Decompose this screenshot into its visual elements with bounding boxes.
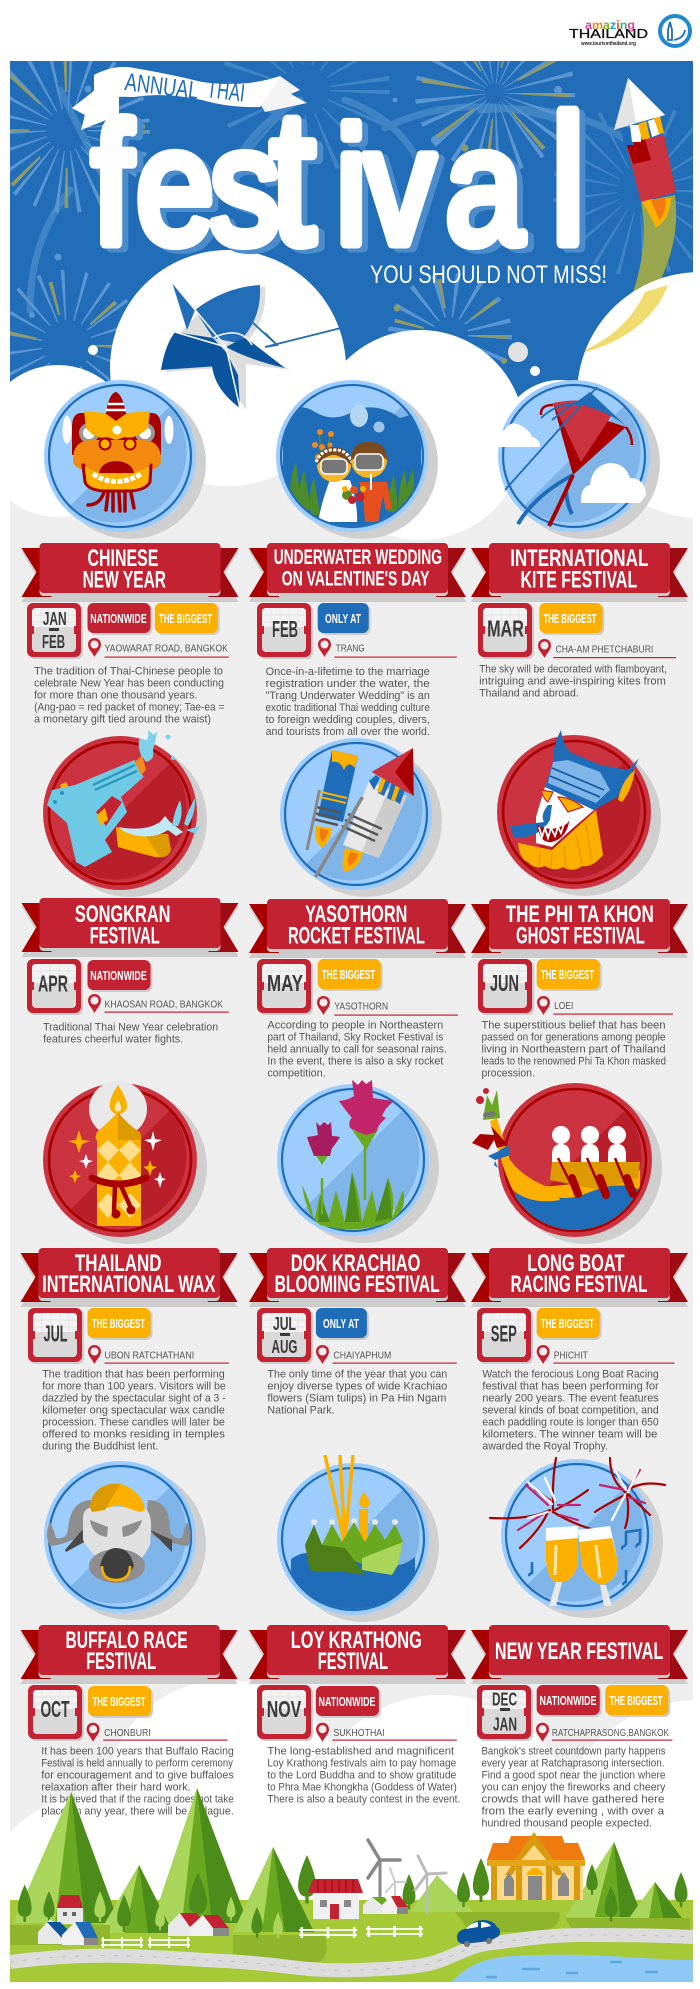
badge: nationwide	[537, 1685, 602, 1717]
logo: blue seal	[660, 16, 690, 46]
description: you can enjoy the fireworks and cheery	[482, 1782, 666, 1794]
location: SUKHOTHAI	[333, 1727, 385, 1739]
subtitle: YOU SHOULD NOT MISS!	[370, 261, 607, 289]
description: (Ang-pao = red packet of money; Tae-ea =	[34, 702, 224, 714]
description: procession.	[482, 1068, 535, 1080]
location	[536, 1723, 672, 1742]
logo: amazing thailand	[569, 18, 648, 47]
ribbon heading: SONGKRAN	[75, 901, 170, 928]
clouds bottom	[10, 1680, 693, 1900]
icon: buffalo	[44, 1461, 206, 1620]
description: In the event, there is also a sky rocket	[267, 1056, 443, 1068]
description: during the Buddhist lent.	[42, 1441, 158, 1453]
location: LOEI	[554, 1000, 573, 1012]
rocket trail behind clouds	[633, 195, 676, 292]
icon: red kite	[497, 380, 660, 539]
description: It has been 100 years that Buffalo Racing	[41, 1746, 234, 1758]
description	[482, 1746, 666, 1830]
location: YAOWARAT ROAD, BANGKOK	[104, 643, 228, 655]
description: for more than 100 years. Visitors will be	[42, 1381, 226, 1393]
temple	[487, 1832, 585, 1900]
icon: underwater couple	[276, 380, 438, 539]
location: PHICHIT	[554, 1350, 588, 1362]
location: UBON RATCHATHANI	[104, 1350, 194, 1362]
description: leads to the renowned Phi Ta Khon masked	[482, 1056, 666, 1068]
ribbon heading: LONG BOAT	[527, 1250, 625, 1277]
description: celebrate New Year has been conducting	[34, 677, 224, 689]
badge: the biggest	[88, 1686, 153, 1718]
description	[267, 1369, 447, 1417]
ribbon heading	[249, 543, 466, 602]
badge: nationwide	[88, 603, 152, 635]
description: held annually to call for seasonal rains.	[267, 1044, 447, 1056]
card: dok krachiao	[249, 1080, 466, 1417]
badge: only at: ONLY AT	[323, 1316, 359, 1331]
badge: the biggest	[88, 1308, 152, 1340]
landscape	[10, 1788, 693, 1982]
description: enjoy diverse types of wide Krachiao	[267, 1381, 447, 1393]
description: several kinds of boat competition, and	[482, 1405, 659, 1417]
trees	[18, 1855, 687, 1938]
description: relaxation after their hard work.	[41, 1782, 191, 1794]
description: The superstitious belief that has been	[482, 1020, 666, 1032]
location: KHAOSAN ROAD, BANGKOK	[104, 999, 223, 1011]
ribbon heading	[249, 1248, 466, 1307]
location: RATCHAPRASONG,BANGKOK	[552, 1727, 669, 1739]
title: festival: a	[445, 94, 524, 279]
description: crowds that will have gathered here	[482, 1794, 664, 1806]
rocket illustration	[614, 78, 676, 228]
location	[87, 1723, 227, 1742]
card: long boat	[471, 1083, 688, 1453]
description	[34, 665, 224, 726]
title: festival	[92, 72, 591, 288]
title: festival: e	[136, 94, 214, 279]
location	[316, 1723, 457, 1742]
title: festival: l	[551, 78, 585, 282]
ribbon heading: FESTIVAL	[318, 1648, 388, 1675]
description	[479, 664, 667, 700]
icon: champagne and fireworks	[490, 1458, 665, 1618]
badge: the biggest	[539, 603, 604, 635]
banner: annual thai: ANNUAL	[123, 68, 200, 105]
location	[318, 638, 457, 658]
location: TRANG	[336, 643, 365, 655]
badge: the biggest	[318, 959, 383, 991]
description: and tourists from all over the world.	[266, 726, 430, 738]
card: yasothorn rocket	[249, 738, 466, 1080]
description: National Park.	[267, 1405, 335, 1417]
description	[41, 1746, 234, 1818]
calendar: jul: JUL	[44, 1321, 68, 1347]
description: According to people in Northeastern	[267, 1020, 443, 1032]
location	[88, 994, 229, 1013]
description: There is also a beauty contest in the event.	[267, 1794, 460, 1806]
ribbon heading	[249, 1625, 466, 1684]
ribbon heading: NEW YEAR	[83, 566, 166, 593]
title: festival: l	[557, 82, 591, 286]
ribbon heading: INTERNATIONAL WAX	[42, 1271, 215, 1298]
description: competition.	[267, 1068, 326, 1080]
description: for more than one thousand years.	[34, 689, 197, 701]
ribbon heading: DOK KRACHIAO	[291, 1250, 420, 1277]
fireworks background	[10, 61, 693, 381]
title: festival: f	[92, 88, 133, 280]
card: loy krathong	[249, 1455, 466, 1806]
calendar: apr	[27, 959, 83, 1015]
badge: the biggest: THE BIGGEST	[92, 1694, 146, 1709]
description: The tradition of Thai-Chinese people to	[34, 665, 223, 677]
badge: nationwide: NATIONWIDE	[318, 1694, 376, 1709]
badge: the biggest: THE BIGGEST	[541, 967, 594, 982]
location	[537, 1345, 674, 1364]
description: Traditional Thai New Year celebration	[43, 1021, 218, 1033]
badge: nationwide: NATIONWIDE	[540, 1693, 597, 1708]
ribbon heading: ROCKET FESTIVAL	[288, 922, 425, 949]
road	[10, 1935, 693, 1970]
title: festival: t	[276, 76, 321, 288]
badge: the biggest: THE BIGGEST	[541, 1316, 594, 1331]
description: Thailand and abroad.	[479, 688, 579, 700]
description: dazzled by the spectacular sight of a 3 -	[42, 1393, 226, 1405]
ribbon heading	[471, 1248, 688, 1307]
description: awarded the Royal Trophy.	[482, 1441, 608, 1453]
ribbon heading: INTERNATIONAL	[510, 545, 648, 572]
description: Find a good spot near the junction where	[482, 1770, 666, 1782]
calendar: feb	[257, 603, 313, 659]
ribbon heading: FESTIVAL	[90, 922, 160, 949]
description: festival that has been performing for	[482, 1381, 659, 1393]
calendar: jul aug: AUG	[272, 1337, 298, 1357]
fences	[101, 1926, 423, 1948]
description: nearly 200 years. The event features	[482, 1393, 659, 1405]
description	[267, 1746, 460, 1806]
description	[266, 666, 430, 738]
calendar: jul aug	[257, 1308, 313, 1364]
description: procession. These candles will later be	[42, 1417, 225, 1429]
calendar: jan feb	[27, 603, 83, 659]
badge: the biggest	[155, 603, 220, 635]
title: festival: i	[336, 94, 367, 279]
ground	[10, 1900, 693, 1982]
card: buffalo race	[21, 1461, 238, 1818]
description: Once-in-a-lifetime to the marriage	[266, 666, 430, 678]
calendar: mar	[478, 603, 534, 659]
location	[537, 996, 673, 1015]
description: hundred thousand people expected.	[482, 1818, 652, 1830]
description: place on any year, there will be a plague.	[41, 1806, 234, 1818]
description: flowers (Siam tulips) in Pa Hin Ngam	[267, 1393, 446, 1405]
wind turbines	[368, 1840, 446, 1913]
calendar: dec jan	[477, 1685, 533, 1741]
ribbon heading	[22, 543, 238, 602]
card: new year festival	[471, 1458, 688, 1830]
description: registration under the water, the	[266, 678, 430, 690]
calendar: mar: MAR	[487, 616, 524, 642]
badge: the biggest: THE BIGGEST	[92, 1316, 145, 1331]
houses	[38, 1879, 408, 1945]
ribbon heading: LOY KRATHONG	[291, 1627, 422, 1654]
ribbon heading: THAILAND	[75, 1250, 162, 1277]
calendar: sep: SEP	[491, 1321, 517, 1347]
description: to foreign wedding couples, divers,	[266, 714, 430, 726]
badge: nationwide	[316, 1686, 381, 1718]
location	[316, 1345, 457, 1364]
logo: amazing thailand: THAILAND	[569, 26, 648, 41]
icon: krathong	[277, 1455, 439, 1622]
description: Festival is held annually to perform ceremony	[41, 1758, 233, 1770]
card: songkran	[22, 730, 238, 1046]
location	[317, 996, 458, 1016]
location	[538, 639, 676, 658]
ribbon heading: CHINESE	[88, 545, 158, 572]
calendar: jan feb: JAN	[43, 609, 67, 629]
icon: ghost mask	[497, 730, 661, 896]
card: wax festival	[21, 1081, 238, 1453]
badge: the biggest	[537, 1308, 602, 1340]
calendar: may	[257, 959, 313, 1015]
location: CHONBURI	[104, 1727, 151, 1739]
ribbon heading: YASOTHORN	[305, 901, 407, 928]
ground shading	[10, 1912, 690, 1962]
badge: the biggest	[605, 1685, 670, 1717]
ribbon heading	[22, 898, 238, 957]
ribbon heading: FESTIVAL	[86, 1648, 156, 1675]
card: phi ta khon	[471, 730, 688, 1080]
calendar: jan feb: FEB	[42, 632, 65, 652]
description: "Trang Underwater Wedding" is an	[266, 690, 430, 702]
calendar: may: MAY	[267, 970, 303, 996]
mountains	[13, 1788, 687, 1933]
icon: water gun and bowl	[43, 730, 207, 897]
description: living in Northeastern part of Thailand	[482, 1044, 666, 1056]
title: festival: s	[210, 94, 280, 279]
calendar: sep	[477, 1308, 533, 1364]
badge: nationwide: NATIONWIDE	[90, 968, 147, 983]
ribbon heading	[21, 1248, 238, 1307]
ribbon heading: KITE FESTIVAL	[520, 566, 637, 593]
icon: candle	[43, 1081, 207, 1244]
title: festival: a	[451, 98, 530, 283]
ribbon heading	[471, 899, 688, 958]
description: every year at Ratchaprasong intersection.	[482, 1758, 664, 1770]
badge: the biggest: THE BIGGEST	[322, 967, 375, 982]
badge: nationwide	[88, 960, 152, 992]
description	[482, 1020, 666, 1080]
description	[42, 1369, 226, 1453]
bubbles	[88, 342, 540, 376]
description: The tradition that has been performing	[42, 1369, 225, 1381]
badge: only at	[316, 1308, 369, 1340]
rocket trail over cloud	[584, 285, 668, 352]
description: The sky will be decorated with flamboyant,	[479, 664, 667, 676]
description: for encouragement and to give buffaloes	[41, 1770, 234, 1782]
ribbon heading: ON VALENTINE'S DAY	[282, 567, 429, 590]
badge: the biggest	[537, 959, 602, 991]
description: each paddling route is longer than 650	[482, 1417, 659, 1429]
calendar: jun: JUN	[490, 970, 519, 996]
hero blue sky	[10, 61, 693, 421]
calendar: nov: NOV	[267, 1696, 302, 1722]
description: features cheerful water fights.	[43, 1034, 183, 1046]
title: festival: v	[365, 94, 435, 279]
ribbon heading: UNDERWATER WEDDING	[274, 546, 442, 569]
description: The only time of the year that you can	[267, 1369, 447, 1381]
card: chinese new year	[22, 380, 238, 726]
description: part of Thailand, Sky Rocket Festival is	[267, 1031, 444, 1043]
icon: lion dance head	[44, 380, 206, 539]
calendar: jun	[478, 959, 534, 1015]
description: offered to monks residing in temples	[42, 1429, 225, 1441]
title: festival: f	[98, 92, 139, 284]
card: underwater wedding	[249, 380, 466, 738]
title: festival: i	[342, 98, 373, 283]
icon: long boat	[472, 1083, 662, 1244]
calendar: feb: FEB	[272, 616, 298, 642]
icon: siam tulips	[277, 1080, 439, 1243]
calendar: apr: APR	[38, 971, 68, 997]
description: kilometers. The winner team will be	[482, 1429, 657, 1441]
calendar: oct: OCT	[40, 1696, 70, 1722]
clouds top	[0, 250, 700, 540]
calendar: dec jan: DEC	[492, 1690, 517, 1710]
description	[43, 1021, 218, 1046]
badge: only at	[318, 603, 371, 635]
description: to the Lord Buddha and to show gratitude	[267, 1770, 456, 1782]
car	[457, 1920, 500, 1947]
description: Bangkok's street countdown party happens	[482, 1746, 666, 1758]
calendar: dec jan: JAN	[493, 1715, 517, 1735]
location: YASOTHORN	[334, 1001, 388, 1013]
title: festival: t	[270, 72, 315, 284]
card: kite festival	[471, 380, 688, 700]
illustration: paper kite	[161, 282, 341, 410]
description: Watch the ferocious Long Boat Racing	[482, 1369, 659, 1381]
description: It is believed that if the racing does not take	[41, 1794, 234, 1806]
badge: the biggest: THE BIGGEST	[159, 611, 212, 626]
badge: the biggest: THE BIGGEST	[544, 611, 597, 626]
description: The long-established and magnificent	[267, 1746, 454, 1758]
calendar: oct	[28, 1685, 84, 1741]
description	[267, 1020, 447, 1080]
lake	[451, 1955, 693, 1982]
calendar: jul	[28, 1308, 84, 1364]
banner: annual thai: THAI	[205, 75, 246, 108]
badge: the biggest: THE BIGGEST	[610, 1693, 663, 1708]
calendar: nov	[257, 1685, 313, 1741]
description: passed on for generations among people	[482, 1031, 666, 1043]
ribbon heading	[471, 543, 688, 602]
badge: nationwide: NATIONWIDE	[90, 611, 147, 626]
ribbon heading: BUFFALO RACE	[66, 1627, 188, 1654]
description: a monetary gift tied around the waist)	[34, 714, 211, 726]
ribbon heading	[21, 1625, 238, 1684]
logo: amazing thailand: www.tourismthailand.org	[580, 41, 636, 47]
badge: only at: ONLY AT	[325, 611, 361, 626]
location: CHAIYAPHUM	[333, 1350, 391, 1362]
ribbon heading	[471, 1625, 688, 1684]
description: kilometer ong spectacular wax candle	[42, 1405, 225, 1417]
description: from the early evening , with over a	[482, 1806, 665, 1818]
title: festival: v	[371, 98, 441, 283]
logo: amazing thailand: amazing	[585, 18, 635, 32]
description: Loy Krathong festivals aim to pay homage	[267, 1758, 456, 1770]
banner: annual thai	[72, 67, 307, 130]
title: festival: e	[142, 98, 220, 283]
description: intriguing and awe-inspiring kites from	[479, 676, 666, 688]
location	[88, 638, 229, 658]
description: to Phra Mae Khongkha (Goddess of Water)	[267, 1782, 457, 1794]
title: festival: s	[216, 98, 286, 283]
icon: rockets	[280, 738, 442, 897]
location	[88, 1345, 229, 1364]
ribbon heading	[249, 899, 466, 958]
ribbon heading: BLOOMING FESTIVAL	[275, 1271, 440, 1298]
calendar: jul aug: JUL	[273, 1314, 296, 1334]
description	[482, 1369, 659, 1453]
description: exotic traditional Thai wedding culture	[266, 702, 430, 714]
location: CHA-AM PHETCHABURI	[556, 643, 653, 655]
